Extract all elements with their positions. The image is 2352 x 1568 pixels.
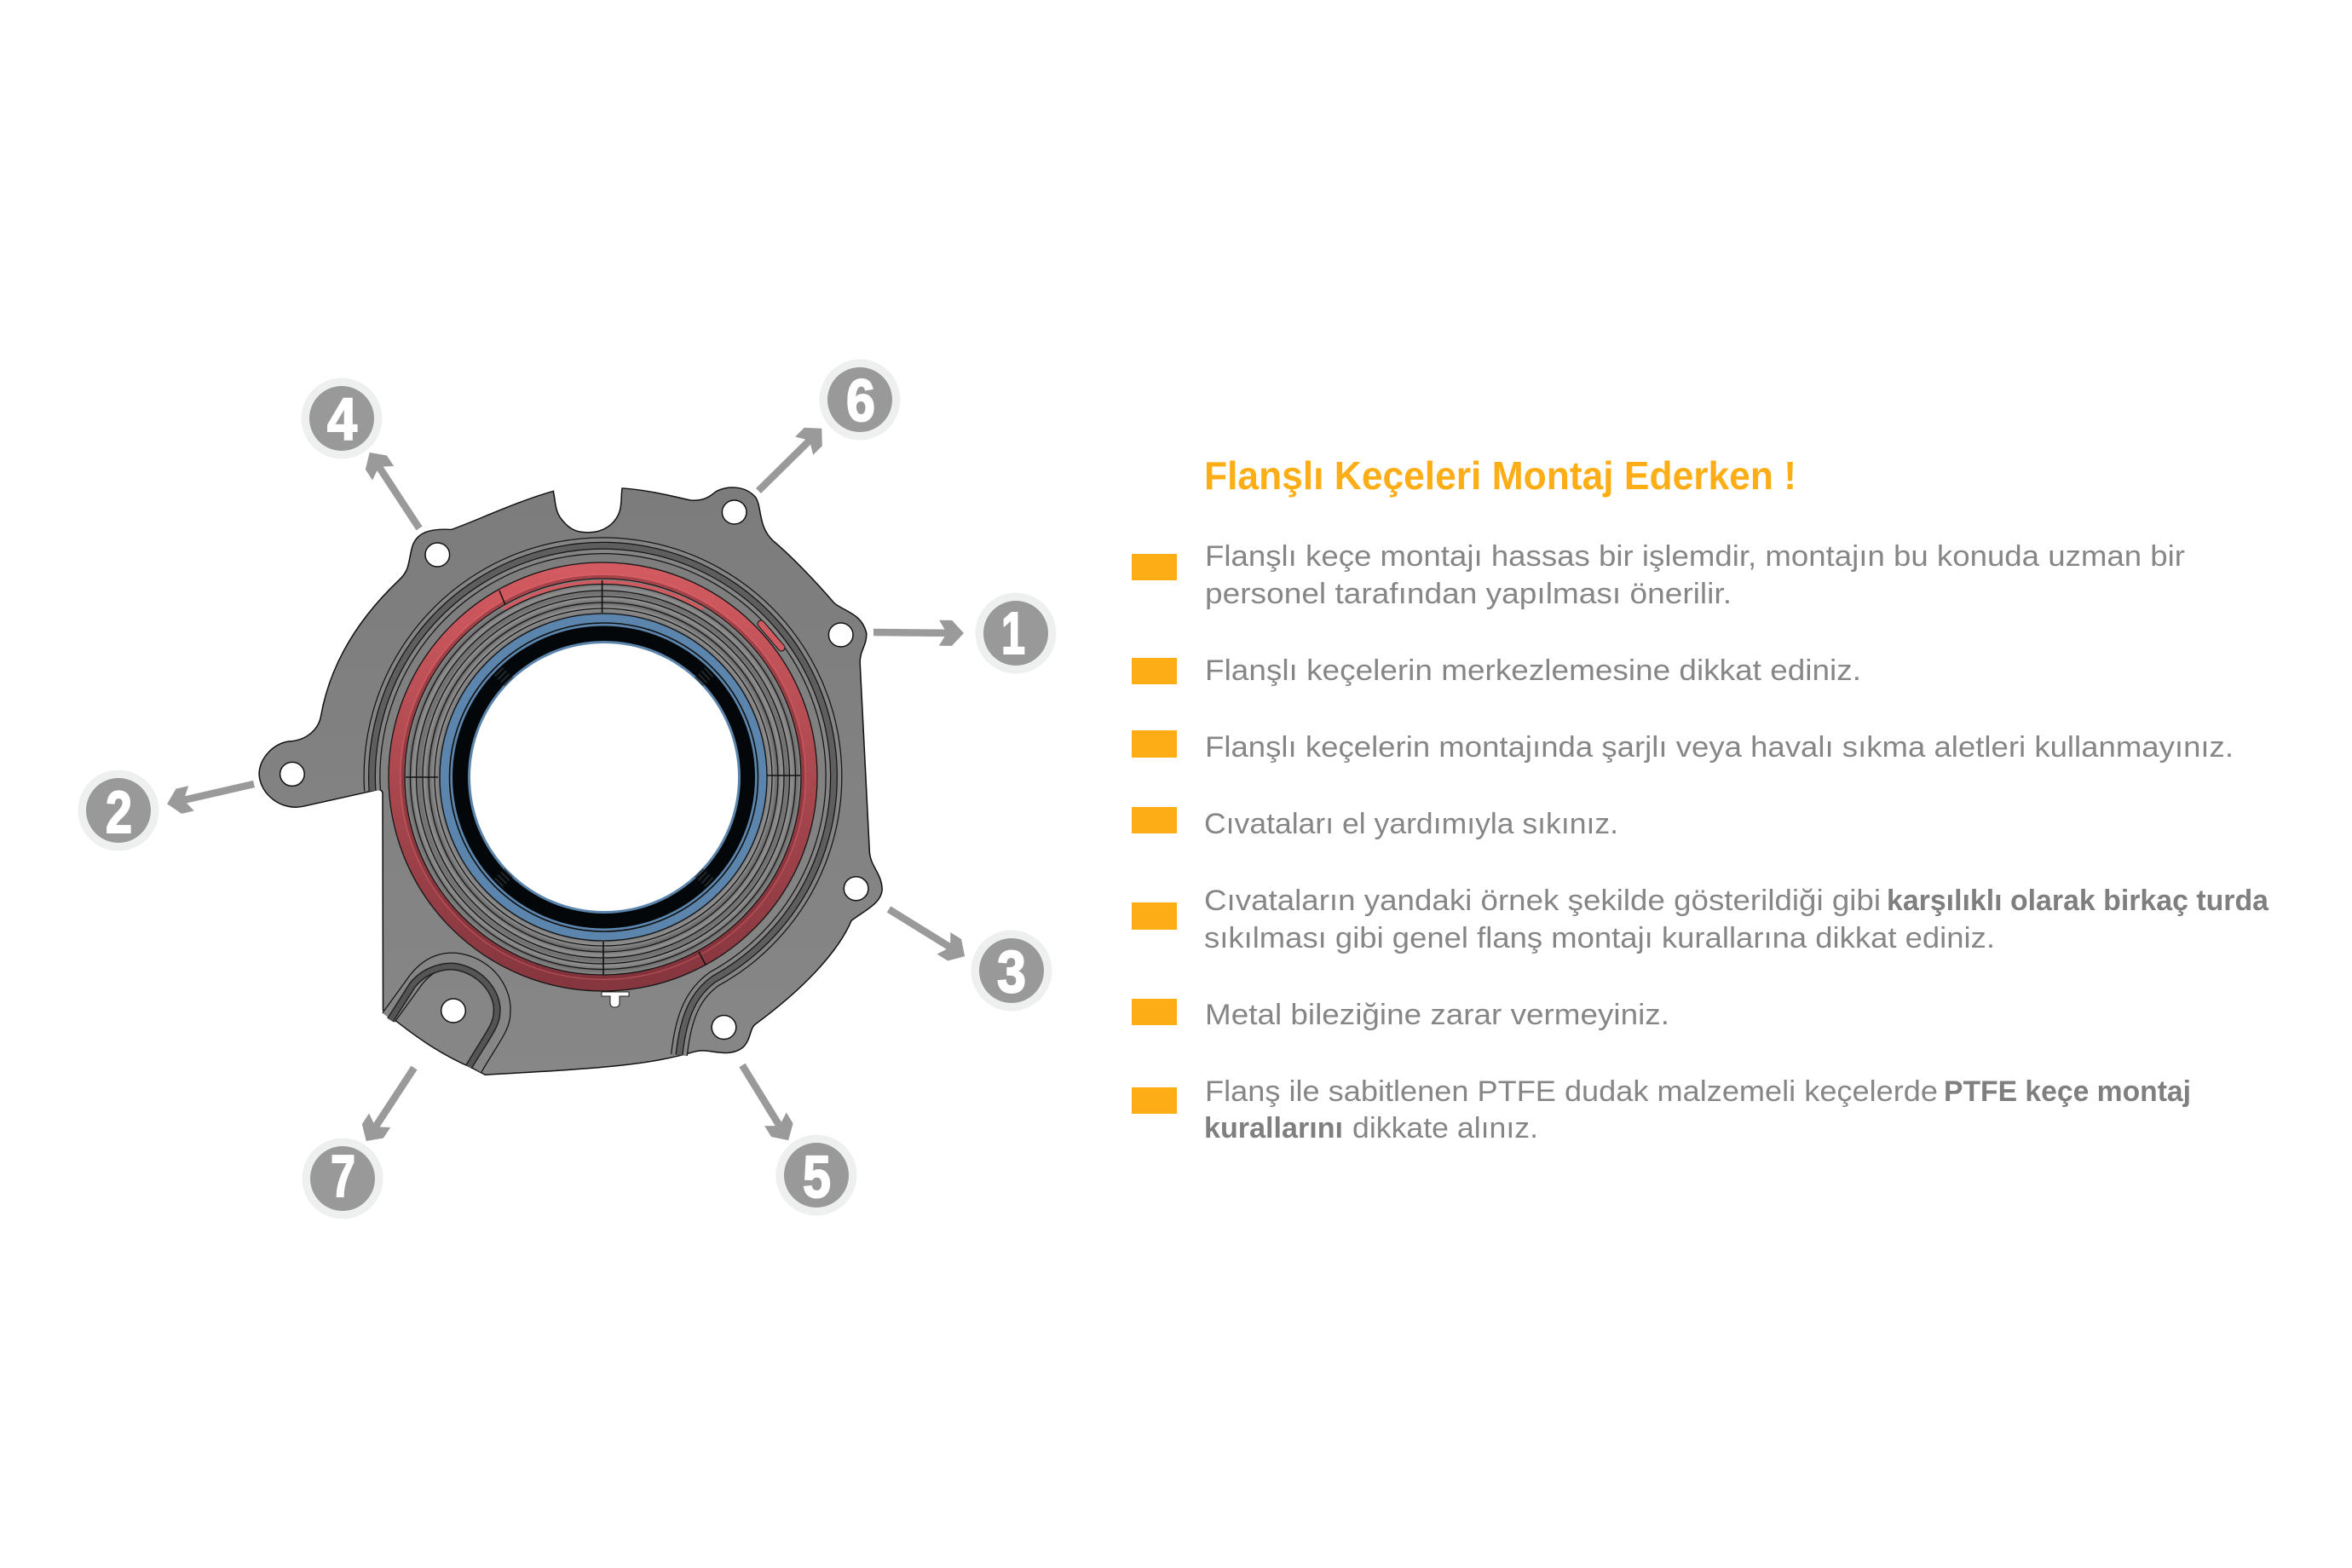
callout 6: arrow and number: 6 bbox=[846, 367, 875, 434]
list item 5: sıkılması gibi genel flanş montajı kurallarına dikkat ediniz. bbox=[1204, 922, 1995, 954]
callout 6: arrow and number bbox=[758, 360, 900, 491]
concentric seal lip lines bbox=[405, 579, 801, 975]
list item 7: PTFE keçe montaj bbox=[1944, 1075, 2191, 1108]
list item 4: Cıvataları el yardımıyla sıkınız. bbox=[1204, 808, 1618, 840]
callout 4: arrow and number: 4 bbox=[327, 386, 357, 453]
T slot at bottom of ring bbox=[602, 992, 629, 1007]
list item 7: Flanş ile sabitlenen PTFE dudak malzemeli keçelerde bbox=[1205, 1075, 1938, 1108]
radial alignment ticks bbox=[406, 580, 800, 975]
callout 2: arrow and number: 2 bbox=[106, 779, 132, 845]
list item 5: karşılıklı olarak birkaç turda bbox=[1887, 885, 2269, 917]
callout 5: arrow and number: 5 bbox=[803, 1144, 831, 1210]
bolt pocket groove, lower left bbox=[389, 960, 503, 1069]
callout 4: arrow and number bbox=[302, 378, 419, 528]
list item 5 bbox=[1132, 885, 2269, 954]
list item 7 bbox=[1132, 1075, 2191, 1144]
list item 2: Flanşlı keçelerin merkezlemesine dikkat ediniz. bbox=[1205, 654, 1861, 687]
thin red slit arc at top bbox=[504, 582, 701, 608]
list item 6: Metal bileziğine zarar vermeyiniz. bbox=[1205, 999, 1669, 1031]
callout 1: arrow and number bbox=[873, 593, 1057, 673]
flange seal diagram bbox=[259, 487, 882, 1075]
title: Flanşlı Keçeleri Montaj Ederken ! bbox=[1204, 453, 1796, 498]
flange body outline bbox=[259, 487, 882, 1075]
list item 5: Cıvataların yandaki örnek şekilde gösterildiği gibi bbox=[1204, 885, 1881, 917]
red sealing ring bbox=[389, 562, 817, 991]
list item 1: Flanşlı keçe montajı hassas bir işlemdir, montajın bu konuda uzman bir bbox=[1205, 540, 2185, 573]
list item 7: dikkate alınız. bbox=[1352, 1112, 1538, 1144]
list item 3: Flanşlı keçelerin montajında şarjlı veya havalı sıkma aletleri kullanmayınız. bbox=[1205, 731, 2234, 764]
callout 3: arrow and number: 3 bbox=[997, 938, 1026, 1005]
callout 5: arrow and number bbox=[742, 1065, 857, 1215]
bolt holes bbox=[280, 500, 868, 1040]
list item 7: kurallarını bbox=[1204, 1112, 1343, 1144]
blue ring and black lip bbox=[440, 614, 767, 941]
callout 1: arrow and number: 1 bbox=[1001, 600, 1025, 666]
callout 7: arrow and number bbox=[302, 1068, 414, 1219]
list item 1: personel tarafından yapılması önerilir. bbox=[1205, 578, 1732, 610]
callout 3: arrow and number bbox=[889, 909, 1052, 1011]
outer groove running around the seal bbox=[372, 545, 833, 1055]
list item 1 bbox=[1132, 540, 2185, 610]
red tab marker bbox=[761, 624, 781, 648]
callout 7: arrow and number: 7 bbox=[331, 1143, 355, 1209]
callout 2: arrow and number bbox=[78, 770, 254, 850]
